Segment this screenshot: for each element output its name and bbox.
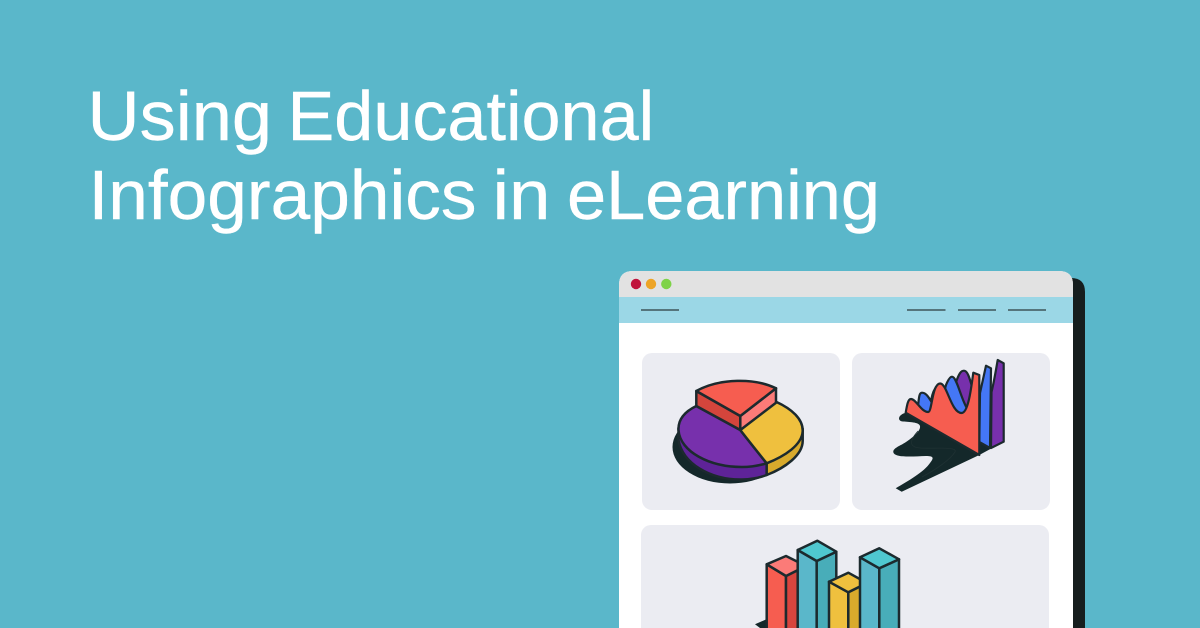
purple area series: [930, 371, 973, 412]
window body: [619, 271, 1073, 628]
purple side panel: [991, 360, 1004, 448]
area chart shadow: [893, 413, 1004, 492]
yellow bar: [829, 573, 867, 628]
blue side panel: [979, 366, 991, 448]
pie chart: [678, 381, 803, 480]
window drop shadow: [1000, 278, 1085, 628]
red area series: [906, 373, 979, 455]
window control dots: [631, 279, 672, 289]
title bar: [619, 271, 1073, 297]
title: [88, 77, 880, 234]
bar shadow: [755, 619, 767, 628]
browser window: [619, 271, 1085, 628]
red bar: [767, 556, 806, 628]
title: in: [492, 156, 550, 234]
shadow contour lines: [912, 431, 955, 477]
panel: pie chart: [642, 353, 840, 510]
title: eLearning: [567, 156, 880, 234]
pie shadow: [672, 410, 788, 484]
title: Educational: [288, 77, 654, 155]
blue area series: [918, 377, 975, 420]
bar chart: [767, 541, 899, 628]
panel: bar chart: [641, 525, 1049, 628]
navigation bar: [619, 297, 1073, 323]
panel: area chart: [852, 353, 1050, 510]
title: Using: [88, 77, 272, 155]
teal bar two: [860, 548, 899, 628]
title: Infographics: [88, 156, 476, 234]
teal bar one: [798, 541, 836, 628]
